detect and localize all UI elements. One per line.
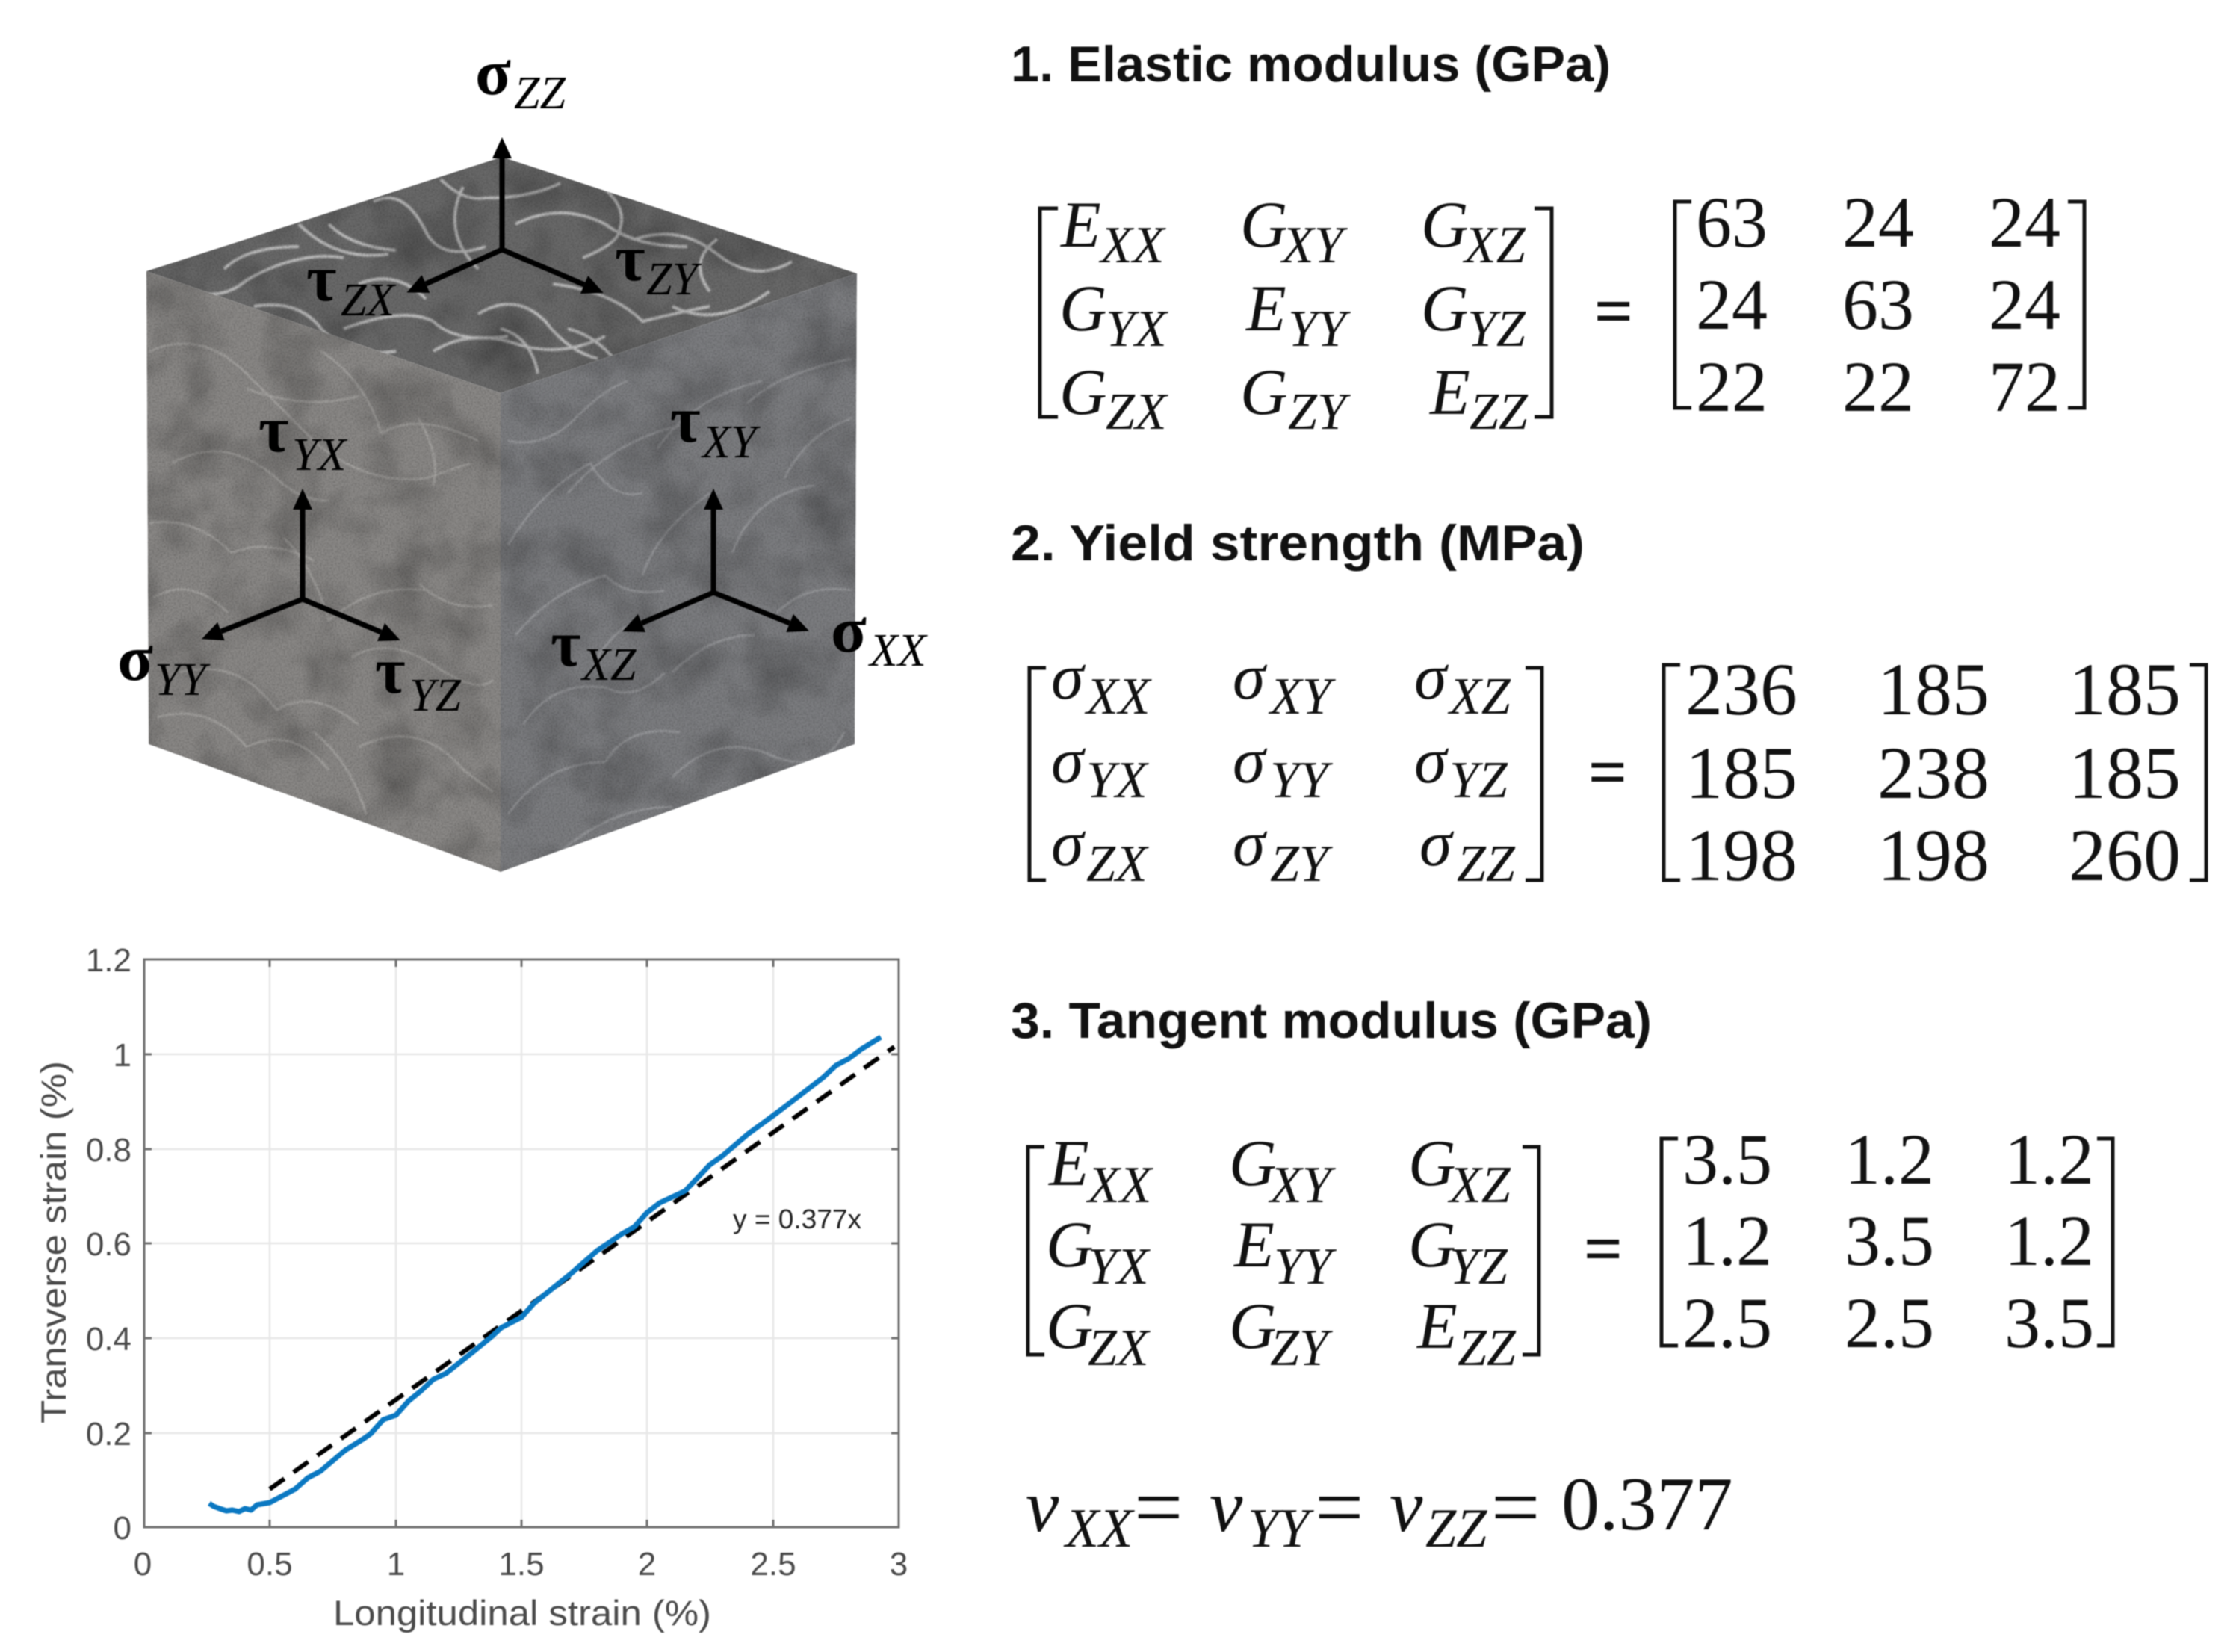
equation: Poisson ratio: ν [1390,1464,1422,1547]
equation: tangent modulus matrices [1028,1119,2113,1377]
yield symbol matrix: XZ [1447,668,1511,726]
elastic value matrix: 24 [1842,182,1914,262]
tangent symbol matrix: G [1408,1209,1456,1281]
arrows: left face axes [221,510,381,632]
tangent symbol matrix: YZ [1449,1238,1508,1296]
yield symbol matrix: ZZ [1457,835,1516,893]
heading: tangent modulus: 3. Tangent modulus (GPa) [1011,992,1652,1049]
chart grid and axes [144,959,899,1527]
yield symbol matrix: σ [1414,641,1446,714]
tangent symbol matrix: G [1229,1127,1277,1200]
x axis tick labels: 0.5 [247,1546,293,1583]
equation: Poisson ratio: YY [1248,1498,1314,1559]
yield symbol matrix: σ [1051,641,1083,714]
tangent value matrix: 1.2 [1682,1201,1772,1281]
tangent symbol matrix: G [1408,1127,1456,1200]
tangent symbol matrix: ZZ [1458,1320,1517,1377]
yield symbol matrix: YX [1086,752,1150,809]
yield symbol matrix: σ [1051,808,1083,880]
yield symbol matrix: YZ [1449,752,1508,809]
tangent value matrix: 1.2 [1845,1119,1934,1199]
elastic value matrix: 24 [1989,182,2060,262]
tangent symbol matrix [1028,1127,1539,1377]
elastic symbol matrix: XZ [1462,217,1526,274]
dashed fit line [270,1047,894,1489]
yield symbol matrix: σ [1233,725,1265,797]
tangent symbol matrix: XZ [1447,1157,1511,1214]
stress labels on cube: τ [258,394,289,466]
equation: Poisson ratio: ZZ [1425,1498,1487,1559]
elastic symbol matrix: G [1240,356,1288,429]
equation: Poisson ratio: = [1315,1460,1363,1556]
stress labels on cube: YX [292,430,347,480]
tangent symbol matrix: G [1229,1290,1277,1363]
y axis tick labels: 0.6 [86,1226,131,1263]
yield value matrix: 185 [2069,731,2181,814]
y axis tick labels: 1 [114,1037,131,1074]
equation: Poisson ratio: ν [1026,1464,1059,1547]
panel: textured cube with stress arrows [117,37,928,878]
y axis tick labels [86,942,131,1547]
yield value matrix: 185 [1877,648,1989,731]
measured strain curve [209,1037,881,1512]
stress labels on cube: σ [117,622,153,695]
equals sign: = [1594,273,1633,349]
elastic symbol matrix: ZY [1288,383,1351,441]
elastic symbol matrix: G [1059,273,1107,345]
equals sign: = [1584,1210,1623,1287]
elastic value matrix: 22 [1842,347,1914,427]
yield symbol matrix: XY [1268,668,1337,726]
elastic symbol matrix: YY [1288,300,1351,358]
x axis title: Longitudinal strain (%) [333,1593,711,1633]
tangent symbol matrix: ZY [1270,1320,1334,1377]
equation: Poisson ratio: = [1491,1460,1540,1556]
equation: elastic modulus matrices [1040,182,2084,441]
yield value matrix: 185 [2069,648,2181,731]
y axis tick labels: 0.8 [86,1132,131,1169]
yield symbol matrix: σ [1233,808,1265,880]
elastic symbol matrix: YZ [1467,300,1526,358]
stress labels on cube: σ [831,594,867,666]
stress labels on cube: XX [867,625,928,676]
tangent value matrix: 2.5 [1682,1283,1772,1363]
yield symbol matrix: ZX [1086,835,1150,893]
y axis title: Transverse strain (%) [34,1061,73,1423]
tangent symbol matrix: E [1234,1209,1275,1281]
x axis tick labels [134,1546,908,1583]
stress labels on cube: YY [155,655,210,705]
elastic value matrix: 22 [1696,347,1768,427]
yield value matrix: 185 [1685,731,1797,814]
tangent value matrix: 1.2 [2004,1201,2094,1281]
stress labels on cube: τ [615,223,645,295]
y axis tick labels: 1.2 [86,942,131,979]
elastic symbol matrix: E [1430,356,1470,429]
yield symbol matrix: σ [1233,641,1265,714]
cube left face [146,271,501,872]
tangent symbol matrix: XX [1086,1157,1154,1214]
stress labels on cube: τ [306,243,337,315]
elastic symbol matrix: ZZ [1470,383,1529,441]
heading: yield strength: 2. Yield strength (MPa) [1011,515,1585,572]
elastic symbol matrix: G [1421,273,1469,345]
yield value matrix: 236 [1685,648,1797,731]
yield symbol matrix [1029,641,1542,893]
stress labels on cube: τ [551,608,581,681]
tangent symbol matrix: ZX [1088,1320,1151,1377]
x axis tick labels: 3 [890,1546,908,1583]
y axis tick labels: 0.2 [86,1416,131,1453]
stress labels on cube: ZY [646,254,702,305]
yield symbol matrix: YY [1270,752,1334,809]
equation: Poisson ratio [1026,1460,1733,1559]
stress labels on cube: ZZ [514,68,566,119]
tangent value matrix: 3.5 [2004,1283,2094,1363]
tangent symbol matrix: E [1049,1127,1089,1200]
yield value matrix: 260 [2069,814,2181,897]
x axis tick labels: 2 [638,1546,656,1583]
elastic symbol matrix: YX [1106,300,1169,358]
equation: Poisson ratio: = [1134,1460,1183,1556]
x axis tick labels: 1 [387,1546,405,1583]
elastic symbol matrix: E [1061,189,1101,262]
x axis tick labels: 2.5 [750,1546,796,1583]
elastic value matrix: 63 [1842,264,1914,344]
cube right face [501,273,857,872]
stress labels on cube: ZX [341,275,396,326]
elastic symbol matrix: XY [1280,217,1348,274]
elastic value matrix: 63 [1696,182,1768,262]
stress labels on cube: σ [475,37,511,109]
fit equation annotation: y = 0.377x [733,1204,861,1234]
elastic symbol matrix: G [1059,356,1107,429]
tangent symbol matrix: E [1417,1290,1458,1363]
tangent value matrix [1662,1119,2113,1363]
elastic symbol matrix [1040,189,1552,441]
yield symbol matrix: σ [1414,725,1446,797]
yield value matrix: 238 [1877,731,1989,814]
equation: yield strength matrices [1029,641,2206,897]
tangent symbol matrix: YY [1274,1238,1337,1296]
elastic value matrix: 24 [1696,264,1768,344]
elastic symbol matrix: G [1421,189,1469,262]
stress labels on cube: XZ [580,640,637,690]
equation: Poisson ratio: 0.377 [1561,1462,1733,1547]
elastic symbol matrix: XX [1098,217,1167,274]
equation: Poisson ratio: XX [1063,1498,1135,1559]
tangent value matrix: 2.5 [1845,1283,1934,1363]
elastic value matrix: 72 [1989,347,2060,427]
arrows: top face axes [426,158,584,285]
yield symbol matrix: σ [1051,725,1083,797]
yield value matrix: 198 [1685,814,1797,897]
tangent value matrix: 3.5 [1845,1201,1934,1281]
x axis tick labels: 1.5 [498,1546,545,1583]
arrows: right face axes [642,510,790,623]
yield value matrix [1664,648,2206,897]
stress labels on cube: τ [375,635,406,708]
y axis tick labels: 0.4 [86,1321,131,1358]
elastic symbol matrix: ZX [1106,383,1169,441]
y axis tick labels: 0 [114,1510,131,1547]
yield symbol matrix: σ [1419,808,1452,880]
stress labels on cube: YZ [409,670,461,721]
elastic value matrix [1675,182,2084,427]
tangent value matrix: 1.2 [2004,1119,2094,1199]
stress labels on cube [117,37,928,721]
yield value matrix: 198 [1877,814,1989,897]
tangent symbol matrix: G [1046,1290,1094,1363]
x axis tick labels: 0 [134,1546,152,1583]
stress labels on cube: τ [670,384,701,457]
equals sign: = [1588,734,1627,810]
equation: Poisson ratio: ν [1210,1464,1242,1547]
yield symbol matrix: ZY [1270,835,1334,893]
tangent symbol matrix: YX [1088,1238,1151,1296]
tangent symbol matrix: G [1046,1209,1094,1281]
tangent value matrix: 3.5 [1682,1119,1772,1199]
elastic symbol matrix: G [1240,189,1288,262]
elastic value matrix: 24 [1989,264,2060,344]
stress labels on cube: XY [700,417,761,468]
cube top face [146,157,857,393]
tangent symbol matrix: XY [1268,1157,1337,1214]
yield symbol matrix: XX [1084,668,1153,726]
panel: strain line chart [34,942,908,1633]
elastic symbol matrix: E [1246,273,1286,345]
heading: elastic modulus: 1. Elastic modulus (GPa) [1011,36,1611,93]
